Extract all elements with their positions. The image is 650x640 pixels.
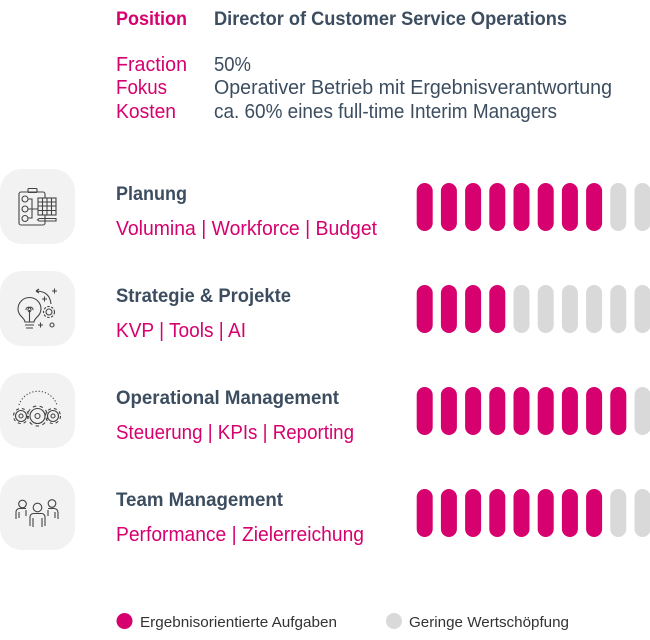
legend marker: results-oriented (116, 613, 132, 629)
subtitle: Performance | Zielerreichung (116, 524, 364, 546)
cost value: ca. 60% eines full-time Interim Managers (214, 101, 557, 123)
legend (116, 613, 569, 631)
legend label: results-oriented: Ergebnisorientierte Aufgaben (140, 615, 337, 631)
fraction value: 50% (214, 54, 251, 76)
panel: Strategie & Projekte (0, 271, 650, 346)
legend marker: low value (386, 613, 402, 629)
heading: Strategie & Projekte (116, 286, 291, 307)
position title: Director of Customer Service Operations (214, 9, 567, 30)
subtitle: Steuerung | KPIs | Reporting (116, 422, 354, 444)
score bar: 9 of 10 (417, 387, 650, 435)
cost label: Kosten (116, 101, 176, 123)
subtitle: KVP | Tools | AI (116, 320, 246, 342)
panel: Planung (0, 169, 650, 244)
heading: Operational Management (116, 388, 340, 409)
focus value: Operativer Betrieb mit Ergebnisverantwortung (214, 77, 612, 99)
position label: Position (116, 9, 187, 30)
icon: light bulb and gear (0, 271, 75, 346)
header: position details (116, 9, 612, 123)
heading: Team Management (116, 490, 284, 511)
subtitle: Volumina | Workforce | Budget (116, 218, 377, 240)
score bar: 8 of 10 (417, 183, 650, 231)
focus label: Fokus (116, 77, 167, 99)
icon: three people (0, 475, 75, 550)
score bar: 4 of 10 (417, 285, 650, 333)
legend label: low value: Geringe Wertschöpfung (409, 615, 569, 631)
heading: Planung (116, 184, 187, 205)
fraction label: Fraction (116, 54, 187, 76)
score bar: 8 of 10 (417, 489, 650, 537)
panel: Team Management (0, 475, 650, 550)
icon: clipboard and calendar (0, 169, 75, 244)
panel: Operational Management (0, 373, 650, 448)
icon: three gears (0, 373, 75, 448)
